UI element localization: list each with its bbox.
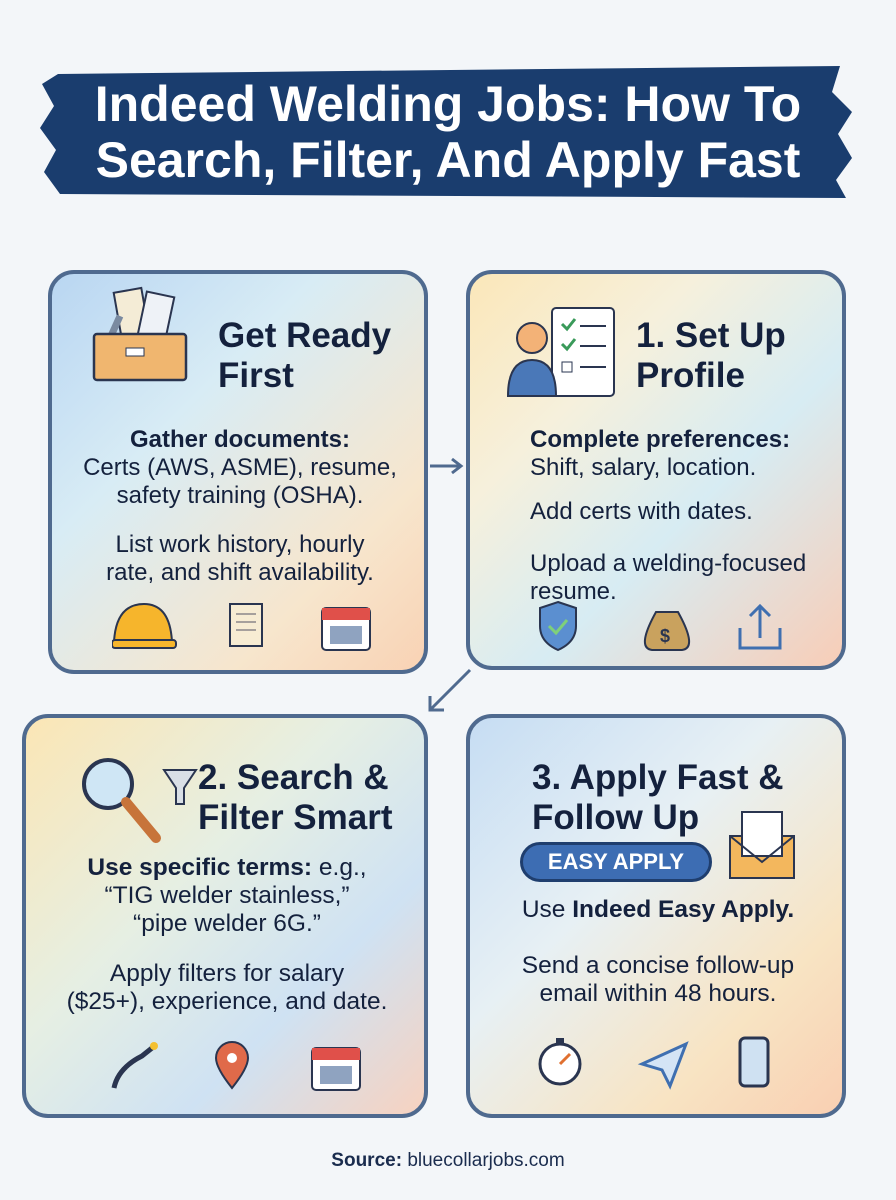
icon: magnifier and funnel [82, 758, 198, 843]
icons: stopwatch, paper plane, phone [538, 1036, 770, 1090]
heading [218, 316, 391, 395]
text block [83, 426, 397, 509]
heading: 3. Apply Fast & [532, 758, 784, 797]
icons: shield, money bag, upload [539, 601, 782, 652]
text block: “TIG welder stainless,” [104, 882, 350, 909]
panel: search & filter [22, 714, 428, 1118]
title banner: Search, Filter, And Apply Fast [96, 132, 800, 188]
panel: get ready first: rate, and shift availability. [106, 559, 374, 586]
easy apply button [520, 842, 712, 882]
panel: apply fast: email within 48 hours. [540, 980, 776, 1007]
icons: helmet, scroll, calendar [112, 603, 371, 651]
title banner [40, 66, 852, 198]
panel: apply fast [466, 714, 846, 1118]
text block: Use Indeed Easy Apply. [522, 896, 794, 923]
panel: set up profile: resume. [530, 578, 617, 605]
arrow: diagonal down-left [428, 669, 471, 712]
arrow: right [430, 458, 464, 474]
source: Source: bluecollarjobs.com [331, 1150, 565, 1171]
text block: Shift, salary, location. [530, 454, 756, 481]
icons: torch, location pin, calendar [112, 1041, 361, 1091]
heading: Profile [636, 356, 745, 395]
icon: profile checklist [507, 307, 615, 397]
panel: get ready first [48, 270, 428, 674]
text block [87, 854, 367, 937]
text block: Complete preferences: [530, 426, 790, 453]
heading: Follow Up [532, 798, 699, 837]
heading: 1. Set Up [636, 316, 786, 355]
text block: Use specific terms: e.g., [87, 854, 367, 881]
text block: “pipe welder 6G.” [133, 910, 321, 937]
panel: set up profile [466, 270, 846, 670]
panel: set up profile: Add certs with dates. [530, 498, 753, 525]
icon: envelope [729, 811, 795, 879]
title banner: Indeed Welding Jobs: How To [95, 76, 801, 132]
heading [198, 758, 392, 837]
panel: get ready first: List work history, hourly [116, 531, 364, 558]
panel: set up profile: Upload a welding-focused [530, 550, 806, 577]
heading: Get Ready [218, 316, 391, 355]
heading [636, 316, 786, 395]
text block: safety training (OSHA). [117, 482, 363, 509]
text block [530, 426, 790, 481]
panel: apply fast: Send a concise follow-up [522, 952, 794, 979]
text block: Gather documents: [130, 426, 350, 453]
heading: Filter Smart [198, 798, 392, 837]
panel: search & filter: ($25+), experience, and date. [67, 988, 387, 1015]
easy apply button: EASY APPLY [548, 849, 684, 874]
heading: First [218, 356, 294, 395]
icons: shield, money bag, upload: $ [660, 626, 670, 646]
heading [532, 758, 784, 837]
text block: Certs (AWS, ASME), resume, [83, 454, 397, 481]
panel: search & filter: Apply filters for salary [110, 960, 344, 987]
icon: toolbox [92, 286, 188, 382]
heading: 2. Search & [198, 758, 389, 797]
